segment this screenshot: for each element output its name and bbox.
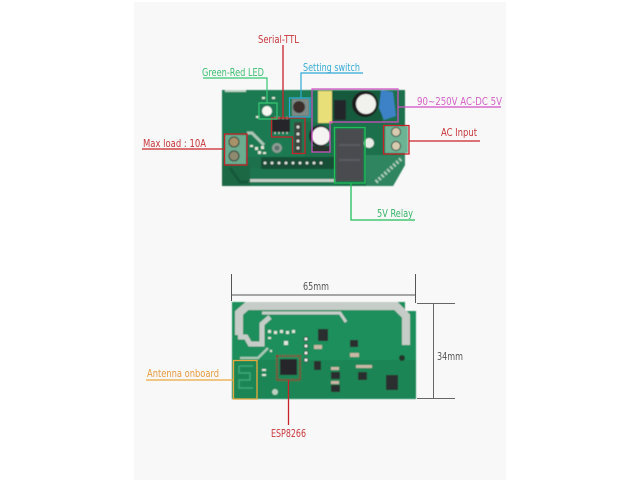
annotation: Max load (142, 134, 247, 165)
dimension: 34mm height: 34mm (437, 351, 463, 363)
annotation: Serial-TTL: Serial-TTL (258, 34, 299, 46)
annotation: 5V Relay (334, 128, 415, 220)
dimension: 34mm height (417, 304, 463, 398)
background panel (134, 2, 506, 480)
annotation: AC Input (384, 126, 480, 154)
photo: top of relay board (222, 90, 408, 186)
annotation: Green-Red LED: Green-Red LED (202, 67, 264, 79)
annotation: 5V Relay: 5V Relay (377, 208, 413, 220)
annotation: Max load: Max load : 10A (143, 138, 207, 150)
annotation: AC Input: AC Input (441, 127, 477, 139)
dimension: 65mm width: 65mm (303, 281, 329, 293)
dimension: 65mm width (232, 274, 416, 303)
annotation: 90~250V AC-DC 5V (312, 89, 503, 152)
annotation: 90~250V AC-DC 5V: 90~250V AC-DC 5V (417, 96, 503, 108)
annotation: ESP8266 (271, 380, 306, 440)
annotation: Antenna onboard: Antenna onboard (147, 368, 219, 380)
annotation: ESP8266: ESP8266 (271, 428, 306, 440)
annotation: Setting switch (290, 62, 363, 117)
annotation: Setting switch: Setting switch (303, 62, 360, 74)
annotation: Antenna onboard (146, 360, 257, 399)
annotation: Green-Red LED (202, 67, 277, 119)
annotation: Serial-TTL (258, 34, 305, 154)
photo: underside of board (232, 302, 416, 399)
